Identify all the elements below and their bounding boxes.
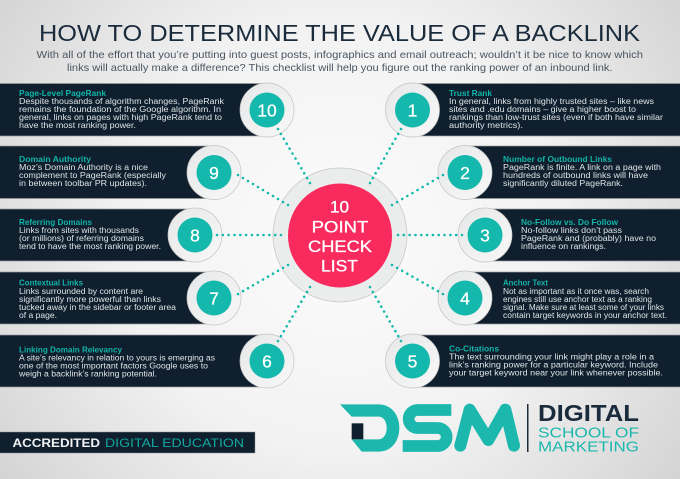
number 3: 3 xyxy=(480,225,490,245)
dotted connectors xyxy=(217,129,462,341)
center badge: 10 xyxy=(330,198,349,216)
panel: contextual links: significantly more powerful than links xyxy=(19,295,161,304)
number 5: 5 xyxy=(408,351,417,371)
panel: page-level pagerank: Page-Level PageRank xyxy=(19,89,106,98)
panel: referring domains xyxy=(0,208,222,262)
number 10: 10 xyxy=(257,100,277,120)
panel: co-citations: The text surrounding your link might play a role in a xyxy=(449,352,655,362)
panel: page-level pagerank: general, links on pages with high PageRank tend to xyxy=(19,113,223,122)
panel: referring domains: (or millions) of referring domains xyxy=(19,234,144,243)
panel: number of outbound links: significantly diluted PageRank. xyxy=(503,179,623,188)
panel: anchor text: Not as important as it once was, search xyxy=(503,287,649,296)
center badge xyxy=(273,168,407,302)
number 4: 4 xyxy=(460,288,470,308)
logo divider xyxy=(527,404,528,452)
panel: co-citations xyxy=(386,334,680,388)
panel: trust rank: Trust Rank xyxy=(449,89,492,98)
panel: contextual links xyxy=(0,271,241,325)
panel: linking domain relevancy xyxy=(0,334,294,388)
panel: page-level pagerank xyxy=(0,83,294,137)
intro text: links will actually make a difference? This checklist will help you figure out the ranking power of an inbound link. xyxy=(67,62,612,74)
panel: linking domain relevancy: Linking Domain Relevancy xyxy=(19,346,122,354)
panel: no-follow vs do follow: influence on rankings. xyxy=(521,242,606,251)
panel: number of outbound links: Number of Outbound Links xyxy=(503,155,612,164)
panel: anchor text: engines still use anchor text as a ranking xyxy=(503,295,652,304)
panel: contextual links: tucked away in the sidebar or footer area xyxy=(19,303,177,312)
panel: contextual links: Contextual Links xyxy=(19,278,83,288)
panel: number of outbound links xyxy=(438,146,680,200)
panel: linking domain relevancy: one of the most important factors Google uses to xyxy=(19,362,209,370)
footer banner xyxy=(0,432,255,453)
panel: page-level pagerank: have the most ranking power. xyxy=(19,121,136,130)
logo wordmark: MARKETING xyxy=(538,439,639,456)
panel: number of outbound links: hundreds of outbound links will have xyxy=(503,171,648,180)
panel: anchor text: contain target keywords in your anchor text. xyxy=(503,311,667,320)
panel: number of outbound links: PageRank is finite. A link on a page with xyxy=(503,163,661,172)
panel: co-citations: your target keyword near your link whenever possible. xyxy=(449,368,663,378)
panel: trust rank: rankings than low-trust sites (even if both have similar xyxy=(449,113,663,122)
panel: contextual links: Links surrounded by content are xyxy=(19,287,143,296)
panel: trust rank: In general, links from highly trusted sites – like news xyxy=(449,97,654,106)
panel: trust rank: authority metrics). xyxy=(449,121,523,130)
number 9: 9 xyxy=(209,163,219,183)
panel: no-follow vs do follow: PageRank and (probably) have no xyxy=(521,234,657,243)
intro text: With all of the effort that you’re putting into guest posts, infographics and email outreach; wouldn’t it be nice to know which xyxy=(36,49,643,61)
panel: no-follow vs do follow xyxy=(458,208,680,262)
panel: domain authority: Moz’s Domain Authority is a nice xyxy=(19,163,148,172)
logo: DSM xyxy=(340,400,639,456)
panel: domain authority: Domain Authority xyxy=(19,155,91,164)
number 6: 6 xyxy=(262,351,272,371)
panel: linking domain relevancy: A site’s relevancy in relation to yours is emerging as xyxy=(19,354,215,362)
panel: trust rank xyxy=(386,83,680,137)
center badge: CHECK xyxy=(308,238,372,256)
panel: co-citations: link’s ranking power for a particular keyword. Include xyxy=(449,360,658,370)
panel: contextual links: of a page. xyxy=(19,311,57,320)
panel: anchor text: signal. Make sure at least some of your links xyxy=(503,303,664,312)
logo wordmark: SCHOOL OF xyxy=(538,425,639,442)
logo wordmark: DIGITAL xyxy=(538,400,639,426)
footer banner: ACCREDITED xyxy=(12,436,100,450)
number 1: 1 xyxy=(408,100,417,120)
logo wordmark xyxy=(538,400,639,456)
center badge: POINT xyxy=(312,219,368,237)
panel: domain authority xyxy=(0,146,241,200)
panel: domain authority: in between toolbar PR updates). xyxy=(19,179,147,188)
panel: linking domain relevancy: weigh a backlink’s ranking potential. xyxy=(18,370,157,378)
panel: referring domains: Referring Domains xyxy=(19,218,92,227)
center badge: LIST xyxy=(321,257,358,275)
panel: trust rank: sites and .edu domains – give a higher boost to xyxy=(449,105,637,114)
title: HOW TO DETERMINE THE VALUE OF A BACKLINK xyxy=(39,20,640,46)
panel: page-level pagerank: Despite thousands of algorithm changes, PageRank xyxy=(19,97,224,106)
panel: anchor text xyxy=(438,271,680,325)
intro text xyxy=(36,49,643,74)
panel: anchor text: Anchor Text xyxy=(503,278,548,288)
footer banner: DIGITAL EDUCATION xyxy=(105,436,244,450)
panel: page-level pagerank: remains the foundation of the Google algorithm. In xyxy=(19,105,221,114)
panel: no-follow vs do follow: No-follow links don’t pass xyxy=(521,226,622,235)
panel: referring domains: Links from sites with thousands xyxy=(19,226,139,235)
panel: co-citations: Co-Citations xyxy=(449,344,499,354)
panel: no-follow vs do follow: No-Follow vs. Do Follow xyxy=(521,218,619,227)
panel: referring domains: tend to have the most ranking power. xyxy=(19,242,161,251)
number 2: 2 xyxy=(460,163,470,183)
number 8: 8 xyxy=(190,225,200,245)
number 7: 7 xyxy=(209,288,219,308)
panel: domain authority: complement to PageRank (especially xyxy=(19,171,166,180)
